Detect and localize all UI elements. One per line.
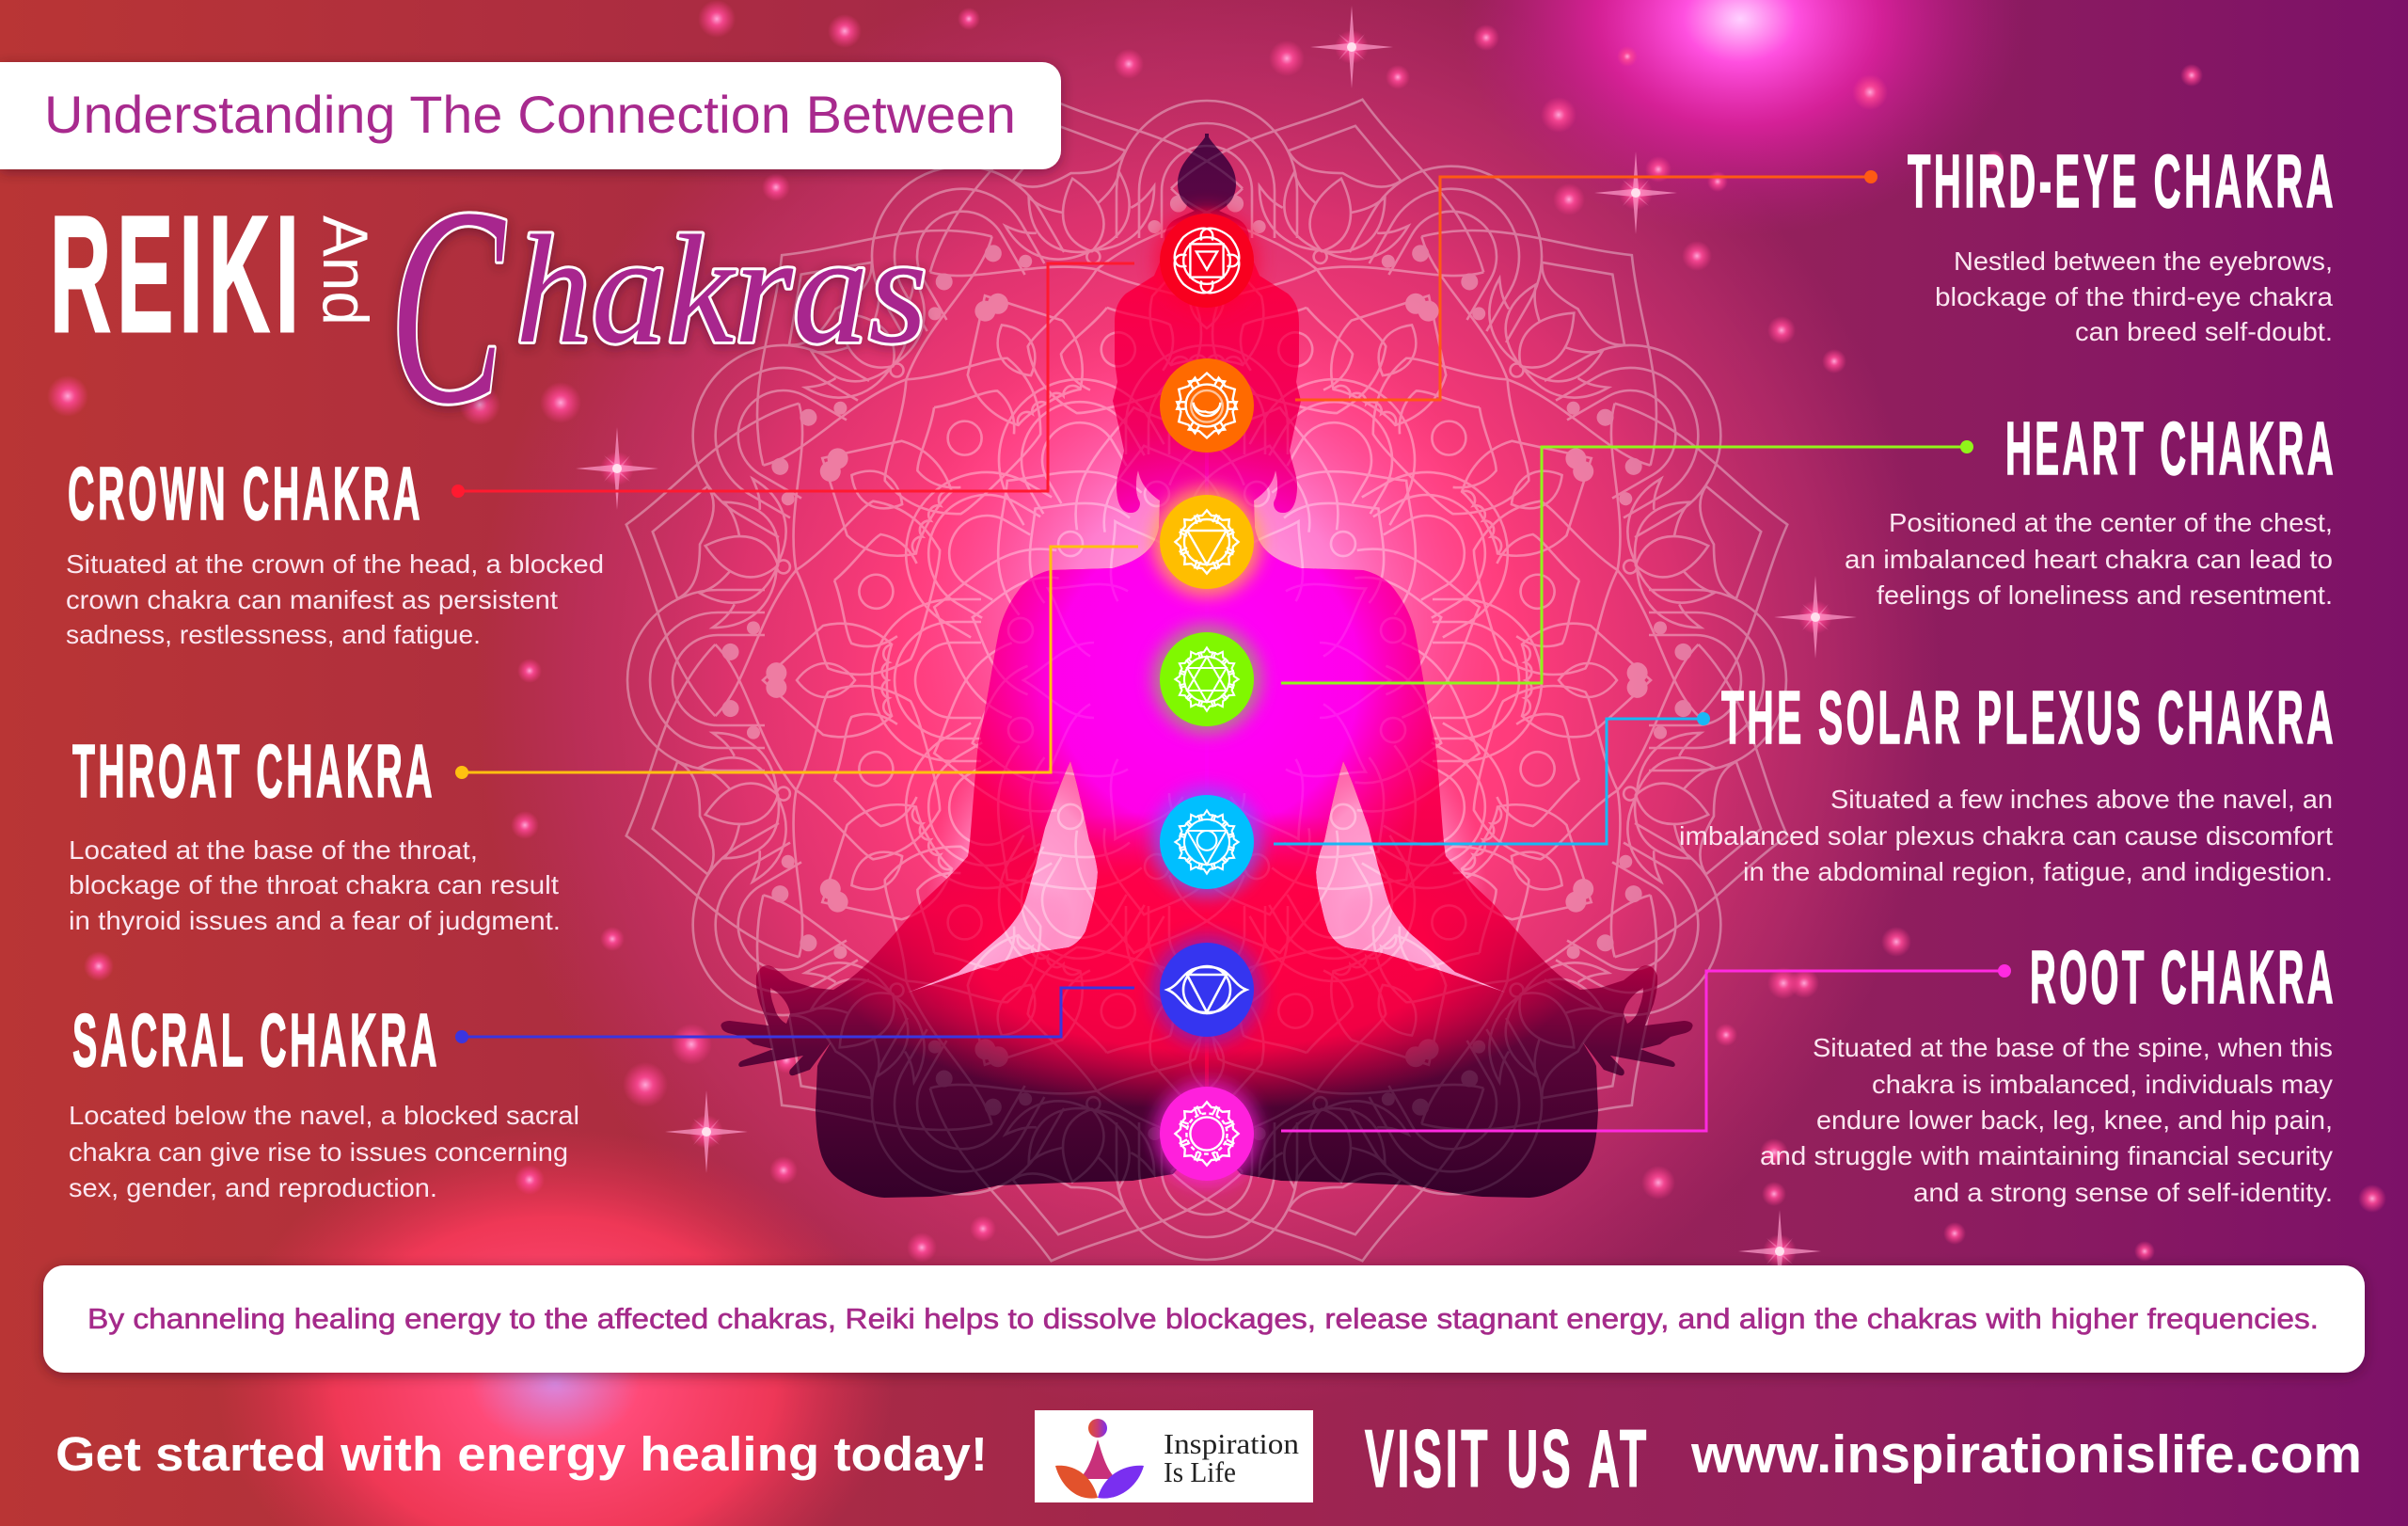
heart chakra text: Positioned at the center of the chest, xyxy=(1889,508,2333,537)
heart chakra text xyxy=(1845,406,2337,610)
logo xyxy=(1035,1410,1313,1502)
solar plexus chakra text: imbalanced solar plexus chakra can cause discomfort xyxy=(1679,821,2333,850)
icon: logo figure xyxy=(1055,1419,1144,1499)
crown chakra text: Situated at the crown of the head, a blocked xyxy=(66,549,604,579)
crown chakra text: sadness, restlessness, and fatigue. xyxy=(66,620,481,649)
title: Reiki: REIKI xyxy=(50,183,305,367)
summary banner xyxy=(43,1265,2365,1373)
sacral chakra text: chakra can give rise to issues concerning xyxy=(69,1137,568,1167)
root chakra text: chakra is imbalanced, individuals may xyxy=(1872,1070,2333,1099)
heart chakra text: an imbalanced heart chakra can lead to xyxy=(1845,545,2333,574)
title: And: And xyxy=(309,215,381,326)
chakra symbol: throat cyan xyxy=(1152,787,1261,897)
chakra symbol: third eye indigo xyxy=(1152,935,1261,1044)
third-eye chakra text xyxy=(1908,139,2337,346)
chakra symbol: root red xyxy=(1154,208,1259,313)
solar plexus chakra text: Situated a few inches above the navel, an xyxy=(1830,785,2333,814)
chakra symbol: solar plexus yellow xyxy=(1152,487,1261,596)
logo: Inspiration xyxy=(1164,1427,1300,1460)
throat chakra text: THROAT CHAKRA xyxy=(72,729,436,813)
root chakra text: and a strong sense of self-identity. xyxy=(1913,1178,2333,1207)
solar plexus chakra text: in the abdominal region, fatigue, and indigestion. xyxy=(1743,857,2333,886)
chakra symbol: crown magenta xyxy=(1154,1081,1259,1186)
connector dots xyxy=(452,170,2011,1043)
meditating figure silhouette xyxy=(512,0,1902,1375)
sacral chakra text: Located below the navel, a blocked sacral xyxy=(69,1101,579,1130)
sacral chakra text: SACRAL CHAKRA xyxy=(72,998,440,1082)
solar plexus chakra text xyxy=(1679,676,2337,886)
chakra symbol: heart green xyxy=(1152,625,1261,734)
throat chakra text: blockage of the throat chakra can result xyxy=(69,870,559,899)
third-eye chakra text: blockage of the third-eye chakra xyxy=(1935,282,2333,311)
call to action: Get started with energy healing today! xyxy=(55,1427,988,1481)
throat chakra text: Located at the base of the throat, xyxy=(69,835,478,865)
root chakra text xyxy=(1760,935,2337,1207)
sparkle stars xyxy=(576,6,1857,1293)
heart chakra text: feelings of loneliness and resentment. xyxy=(1877,580,2333,610)
throat chakra text: in thyroid issues and a fear of judgment. xyxy=(69,906,561,935)
crown chakra text: CROWN CHAKRA xyxy=(68,452,423,535)
title bar xyxy=(0,62,1061,169)
third-eye chakra text: can breed self-doubt. xyxy=(2075,317,2333,346)
third-eye chakra text: Nestled between the eyebrows, xyxy=(1954,246,2333,276)
sacral chakra text xyxy=(69,998,579,1202)
throat chakra text xyxy=(69,729,561,935)
logo: Is Life xyxy=(1164,1455,1236,1488)
root chakra text: Situated at the base of the spine, when this xyxy=(1813,1033,2333,1062)
chakra symbol: sacral orange xyxy=(1160,358,1254,453)
website url: www.inspirationislife.com xyxy=(1690,1424,2362,1485)
visit us at: VISIT US AT xyxy=(1365,1414,1650,1504)
sacral chakra text: sex, gender, and reproduction. xyxy=(69,1173,437,1202)
root chakra text: endure lower back, leg, knee, and hip pain, xyxy=(1816,1105,2333,1135)
title: Chakras: hakras xyxy=(515,203,927,375)
crown chakra text xyxy=(66,452,604,649)
connector lines xyxy=(458,177,2004,1131)
title bar: Understanding The Connection Between xyxy=(44,85,1016,144)
crown chakra text: crown chakra can manifest as persistent xyxy=(66,585,558,614)
summary banner: By channeling healing energy to the affected chakras, Reiki helps to dissolve blockages, release stagnant energy, and align the chakras with higher frequencies. xyxy=(87,1302,2319,1335)
mandala xyxy=(512,0,1902,1375)
root chakra text: and struggle with maintaining financial security xyxy=(1760,1141,2333,1170)
title: Chakras: C xyxy=(389,150,508,462)
